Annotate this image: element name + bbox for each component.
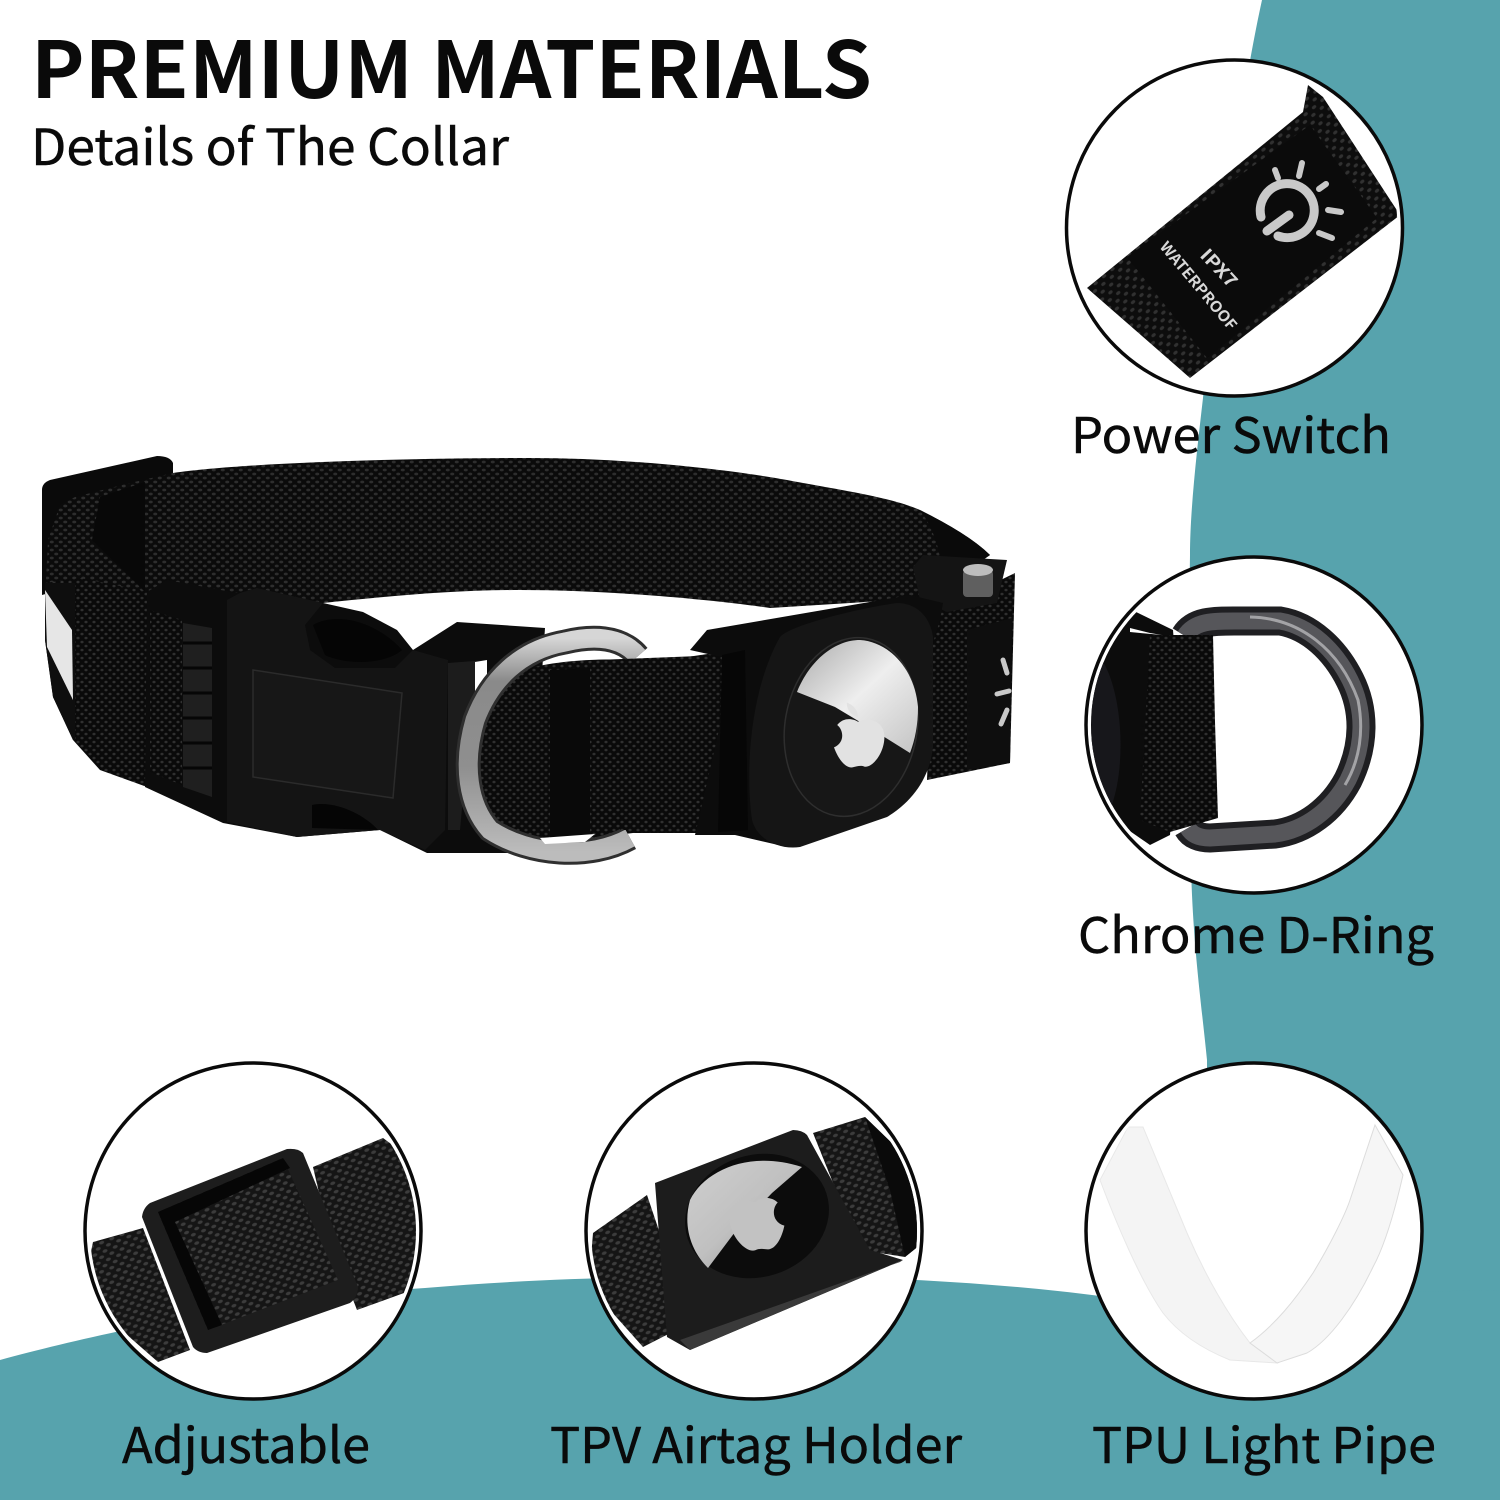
airtag holder square <box>749 603 933 848</box>
subtitle: Details of The Collar <box>31 108 510 180</box>
reflective strip <box>45 590 73 700</box>
airtag disc <box>770 627 932 827</box>
detail: power switch: WATERPROOF <box>1155 237 1242 335</box>
right strap end <box>927 573 1015 780</box>
d-ring <box>468 638 638 852</box>
detail: adjustable slider <box>85 1063 440 1399</box>
ladder teeth <box>183 623 212 797</box>
label: adjustable: Adjustable <box>122 1407 370 1478</box>
title: PREMIUM MATERIALS <box>31 9 872 121</box>
detail: power switch: IPX7 <box>1195 242 1244 293</box>
buckle window <box>448 660 487 830</box>
buckle <box>145 580 545 853</box>
power icon marks <box>997 660 1009 724</box>
detail: tpv airtag holder <box>586 1063 930 1399</box>
strap on d-ring <box>1140 635 1218 832</box>
power icon <box>1260 163 1341 238</box>
apple logo <box>734 1198 784 1251</box>
apple logo <box>834 703 884 767</box>
airtag disc <box>685 1154 829 1278</box>
d-ring metal <box>1185 617 1361 838</box>
label: power switch: Power Switch <box>1071 397 1391 468</box>
left keeper loop <box>42 456 173 595</box>
strap over d-ring end <box>596 656 700 830</box>
buckle panel <box>253 670 402 798</box>
label: tpv airtag holder: TPV Airtag Holder <box>550 1407 963 1478</box>
label: tpu light pipe: TPU Light Pipe <box>1092 1407 1436 1478</box>
detail: chrome d-ring <box>1085 557 1422 893</box>
airtag holder flange <box>690 595 943 847</box>
front strap <box>475 650 735 845</box>
buckle lower notch <box>312 804 378 830</box>
left strap fold <box>45 473 173 600</box>
buckle tongue <box>313 619 402 662</box>
main collar photo <box>42 456 1015 853</box>
detail: tpu light pipe <box>1086 1063 1422 1399</box>
strap through buckle <box>150 610 182 785</box>
label: chrome d-ring: Chrome D-Ring <box>1078 897 1434 968</box>
snap tab with rivet <box>913 555 1007 612</box>
airtag silver segment <box>797 640 918 753</box>
back strap of collar <box>173 458 990 608</box>
detail: power switch <box>1066 60 1402 396</box>
front left strap <box>45 578 150 787</box>
